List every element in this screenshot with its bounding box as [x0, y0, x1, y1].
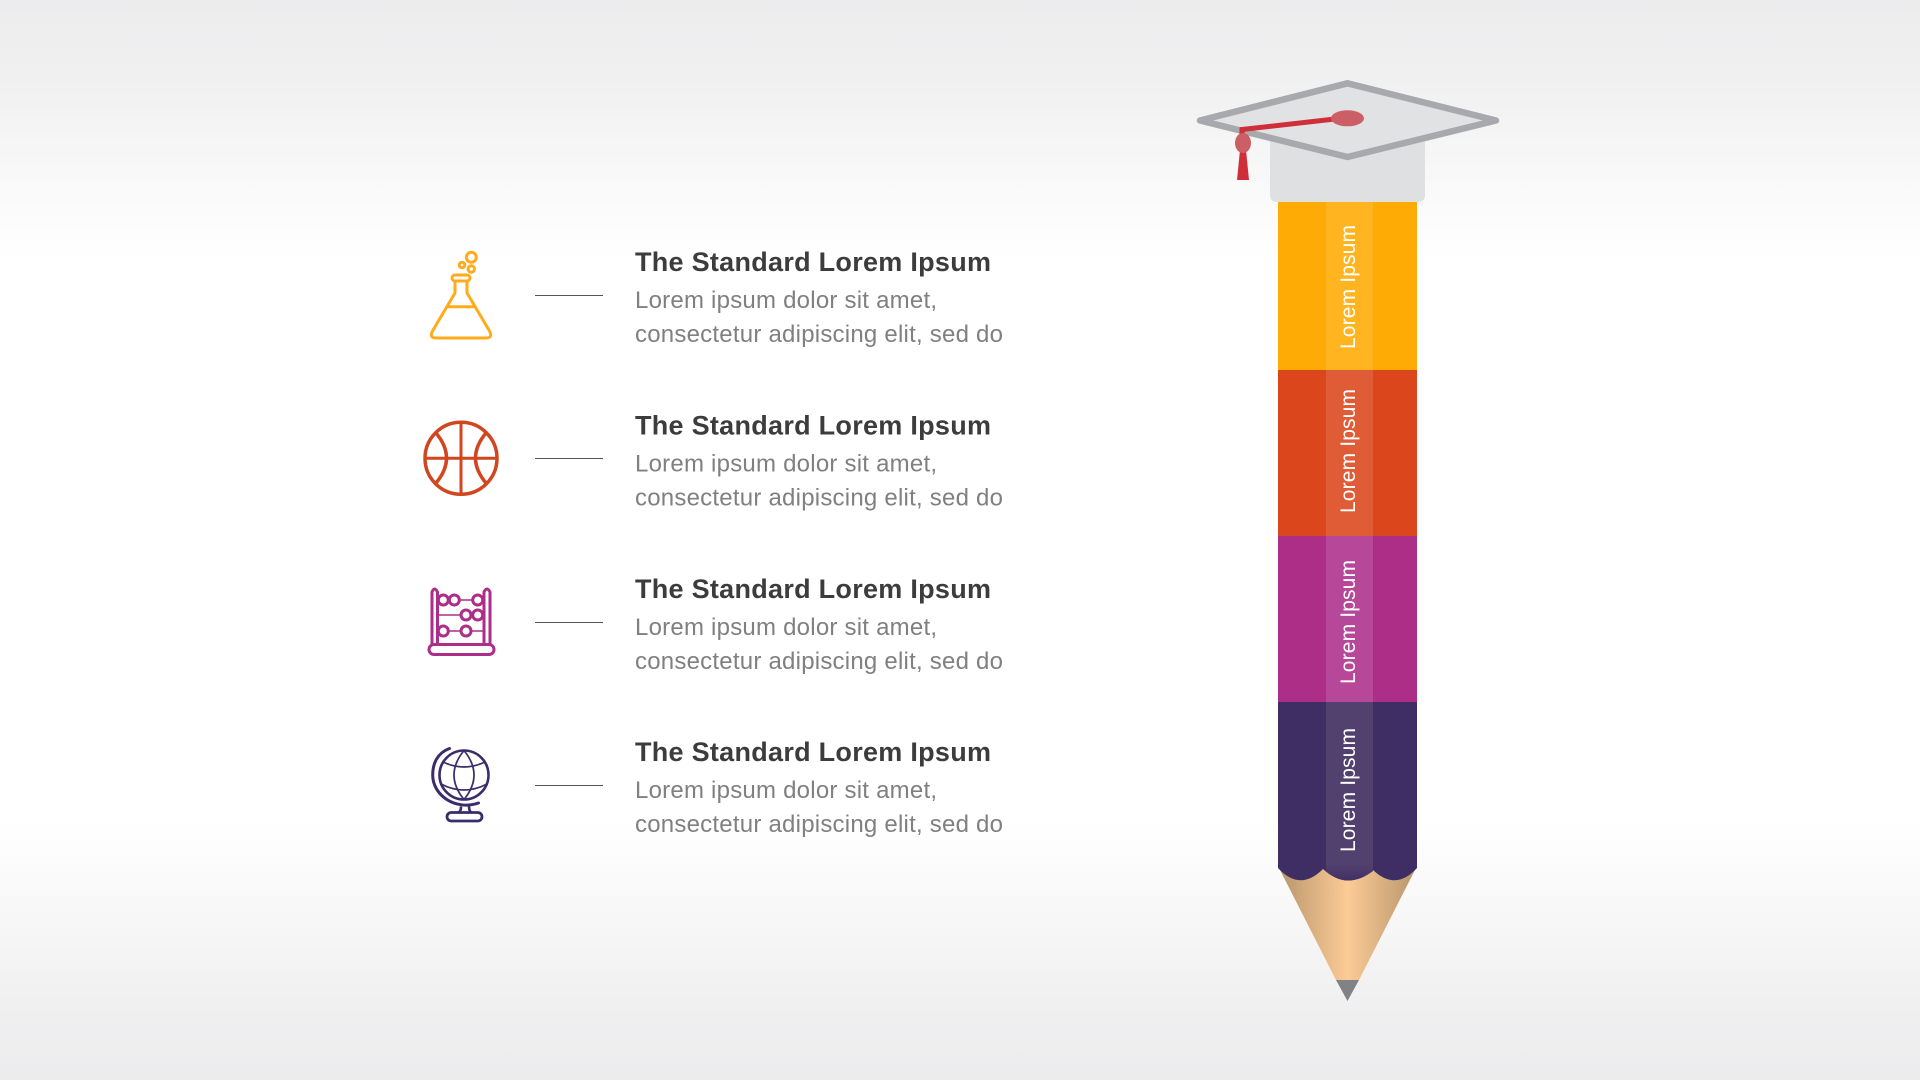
tassel knot — [1235, 133, 1251, 153]
description: Lorem ipsum dolor sit amet, — [635, 777, 937, 804]
cap base — [1270, 135, 1425, 202]
connector line — [535, 295, 603, 296]
band: navy — [1278, 702, 1417, 880]
graduation cap — [1200, 83, 1496, 202]
band: purple — [1278, 536, 1417, 702]
band: red: Lorem Ipsum — [1337, 389, 1360, 513]
description: consectetur adipiscing elit, sed do — [635, 321, 1003, 348]
connector line — [535, 785, 603, 786]
row 4 — [433, 737, 1003, 838]
row 3 — [429, 574, 1003, 675]
band: navy: Lorem Ipsum — [1337, 728, 1360, 852]
description: consectetur adipiscing elit, sed do — [635, 484, 1003, 512]
icon: basketball — [425, 422, 498, 495]
description: consectetur adipiscing elit, sed do — [635, 648, 1003, 675]
pencil tip: wood — [1278, 866, 1417, 980]
description: Lorem ipsum dolor sit amet, — [635, 450, 937, 478]
tassel — [1237, 150, 1249, 180]
cap button — [1331, 110, 1364, 126]
icon: flask — [431, 252, 491, 338]
description: consectetur adipiscing elit, sed do — [635, 811, 1003, 838]
icon: abacus — [429, 589, 494, 654]
pencil tip: graphite — [1336, 980, 1359, 1001]
heading: The Standard Lorem Ipsum — [635, 247, 991, 277]
heading: The Standard Lorem Ipsum — [635, 410, 991, 440]
band: yellow: Lorem Ipsum — [1337, 225, 1360, 349]
row 2 — [425, 410, 1003, 512]
description: Lorem ipsum dolor sit amet, — [635, 287, 937, 314]
pencil — [1278, 202, 1417, 1001]
description: Lorem ipsum dolor sit amet, — [635, 614, 937, 641]
heading: The Standard Lorem Ipsum — [635, 737, 991, 767]
icon: globe — [433, 748, 488, 821]
row 1 — [431, 247, 1003, 348]
tassel cord — [1242, 119, 1335, 140]
connector line — [535, 622, 603, 623]
band: yellow — [1278, 202, 1417, 370]
cap board — [1200, 83, 1496, 157]
band: purple: Lorem Ipsum — [1337, 560, 1360, 684]
band: red — [1278, 370, 1417, 536]
heading: The Standard Lorem Ipsum — [635, 574, 991, 604]
connector line — [535, 458, 603, 459]
